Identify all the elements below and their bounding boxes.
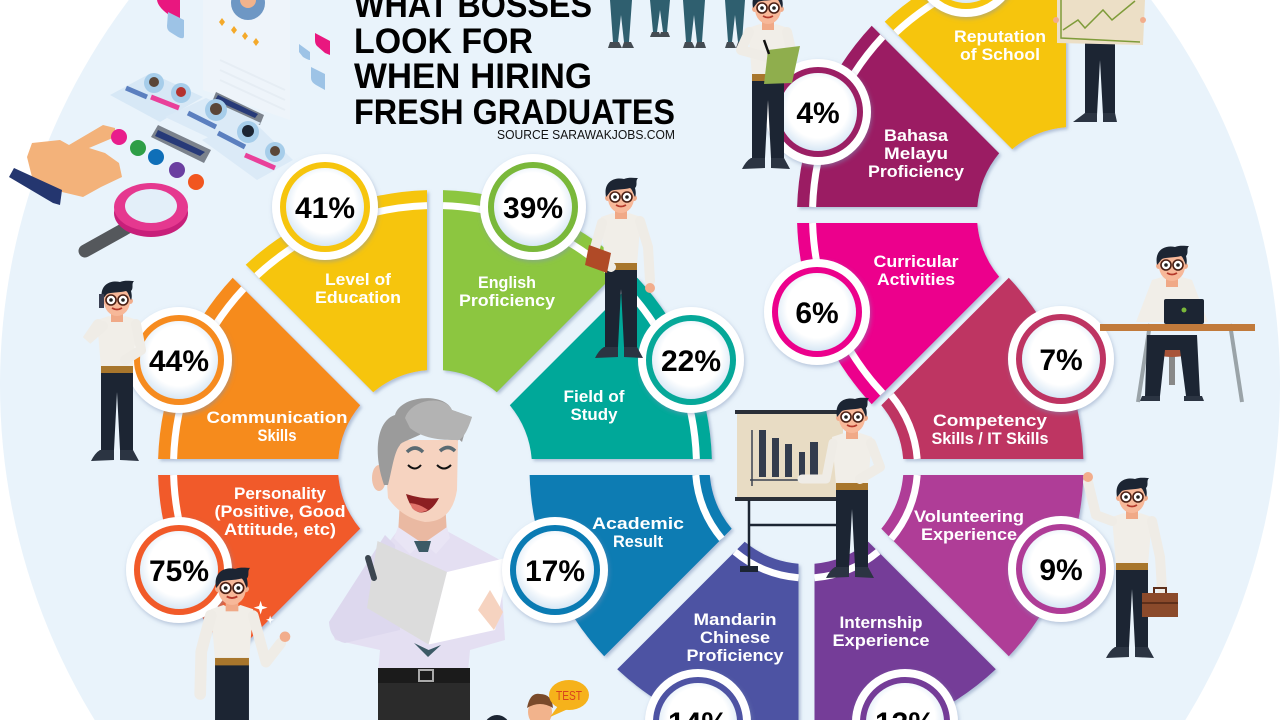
label: mandarin chinese proficiency: Chinese — [700, 629, 770, 647]
badge: 4%: 4% — [796, 97, 840, 130]
wedge: internship experience — [814, 542, 996, 720]
illustration: group of people in teal trousers — [608, 0, 746, 48]
boss neck and collar — [394, 500, 450, 554]
label: personality: (Positive, Good — [214, 503, 346, 521]
boss body — [329, 530, 505, 672]
decorative tiles — [157, 0, 330, 90]
badge: 17%: 17% — [525, 555, 585, 588]
wedge: english proficiency — [443, 190, 624, 392]
wedge: personality — [158, 475, 360, 656]
label: bahasa melayu proficiency: Bahasa — [884, 127, 949, 145]
label: competency skills: Competency — [933, 412, 1048, 430]
wedge: academic result — [530, 475, 732, 656]
badge: 39%: 39% — [503, 192, 563, 225]
label: bahasa melayu proficiency: Melayu — [884, 145, 948, 163]
title: FRESH GRADUATES — [354, 93, 675, 132]
left wheel of factors — [158, 190, 712, 656]
illustration: happy person, personality — [200, 568, 290, 720]
label: curricular activities: Activities — [877, 271, 955, 289]
label: curricular activities: Curricular — [874, 253, 959, 271]
badge: 44% — [126, 307, 232, 413]
wedge: level of education — [246, 190, 427, 392]
title — [354, 0, 675, 132]
badge: 6%: 6% — [795, 297, 839, 330]
illustration: test candidate with speech bubble: TEST — [556, 688, 582, 703]
label: bahasa melayu proficiency: Proficiency — [868, 163, 965, 181]
badge: 4% — [765, 59, 871, 165]
illustration: person on phone, communication — [87, 281, 141, 461]
label: english proficiency: Proficiency — [459, 292, 556, 310]
label: internship experience: Internship — [840, 614, 922, 632]
label: academic result: Result — [613, 533, 663, 551]
label: mandarin chinese proficiency: Proficiency — [686, 647, 784, 665]
illustration: person with clipboard — [741, 0, 800, 169]
illustration: candidate cards and phones — [110, 73, 293, 180]
upper right wheel of factors — [797, 0, 1066, 404]
wedge: mandarin chinese proficiency — [617, 542, 798, 720]
label: academic result: Academic — [592, 515, 684, 533]
badge: 6% — [764, 259, 870, 365]
label: personality: Personality — [234, 485, 327, 503]
illustration: boss reading paper — [329, 398, 510, 720]
badge: 17% — [502, 517, 608, 623]
illustration: presenter with chart board — [735, 398, 880, 578]
badge: 75%: 75% — [149, 555, 209, 588]
label: personality: Attitude, etc) — [224, 521, 336, 539]
boss head — [372, 398, 472, 522]
wedge: field of study — [510, 278, 712, 459]
wedge: competency skills — [881, 278, 1083, 459]
illustration: test candidate with speech bubble — [484, 680, 589, 720]
label: communication skills: Communication — [206, 409, 348, 427]
label: reputation of school: Reputation — [954, 28, 1046, 46]
badge: 14% — [645, 669, 751, 720]
badge: 41% — [272, 154, 378, 260]
badge: 22%: 22% — [661, 345, 721, 378]
label: internship experience: Experience — [832, 632, 930, 650]
label: volunteering experience: Experience — [921, 526, 1017, 544]
label: field of study: Field of — [564, 388, 625, 406]
illustration: person holding growth chart — [1053, 0, 1146, 122]
title: WHEN HIRING — [354, 57, 592, 96]
icon: magnifying glass — [85, 183, 188, 251]
label: volunteering experience: Volunteering — [914, 508, 1024, 526]
badge: 41%: 41% — [295, 192, 355, 225]
badge: 7% — [1008, 306, 1114, 412]
wedge: communication skills — [158, 278, 360, 459]
source line: SOURCE SARAWAKJOBS.COM — [497, 128, 675, 142]
wedge: volunteering experience — [881, 475, 1083, 656]
badge: 9% — [1008, 516, 1114, 622]
illustration: person at desk with laptop — [1100, 246, 1255, 402]
badge: 9%: 9% — [1039, 554, 1083, 587]
title: LOOK FOR — [354, 22, 533, 61]
label: communication skills: Skills — [258, 427, 296, 445]
wedge labels — [206, 28, 1048, 665]
illustration: resume document — [203, 0, 290, 120]
badge: 13% — [852, 669, 958, 720]
illustration: person with book, english proficiency — [585, 178, 655, 358]
wedge: reputation of school — [885, 0, 1066, 149]
lower right wheel of factors — [530, 278, 1083, 720]
icon: pointing hand — [9, 125, 122, 205]
label: level of education: Level of — [325, 271, 392, 289]
wedge: curricular activities — [797, 223, 999, 404]
label: reputation of school: of School — [960, 46, 1040, 64]
open paper — [367, 541, 510, 657]
wedge: bahasa melayu proficiency — [797, 26, 999, 207]
label: competency skills: Skills / IT Skills — [932, 430, 1048, 448]
label: english proficiency: English — [478, 274, 536, 292]
boss belt and trousers — [378, 668, 470, 720]
label: level of education: Education — [315, 289, 401, 307]
label: field of study: Study — [570, 406, 618, 424]
badge: reputation of school, cropped — [913, 0, 1019, 17]
badge: 75% — [126, 517, 232, 623]
illustration: person with briefcase — [1083, 472, 1178, 658]
icon: coloured buttons — [111, 129, 204, 190]
label: mandarin chinese proficiency: Mandarin — [694, 611, 776, 629]
badge: 44%: 44% — [149, 345, 209, 378]
badge: 22% — [638, 307, 744, 413]
badge: 39% — [480, 154, 586, 260]
badge: 7%: 7% — [1039, 344, 1083, 377]
